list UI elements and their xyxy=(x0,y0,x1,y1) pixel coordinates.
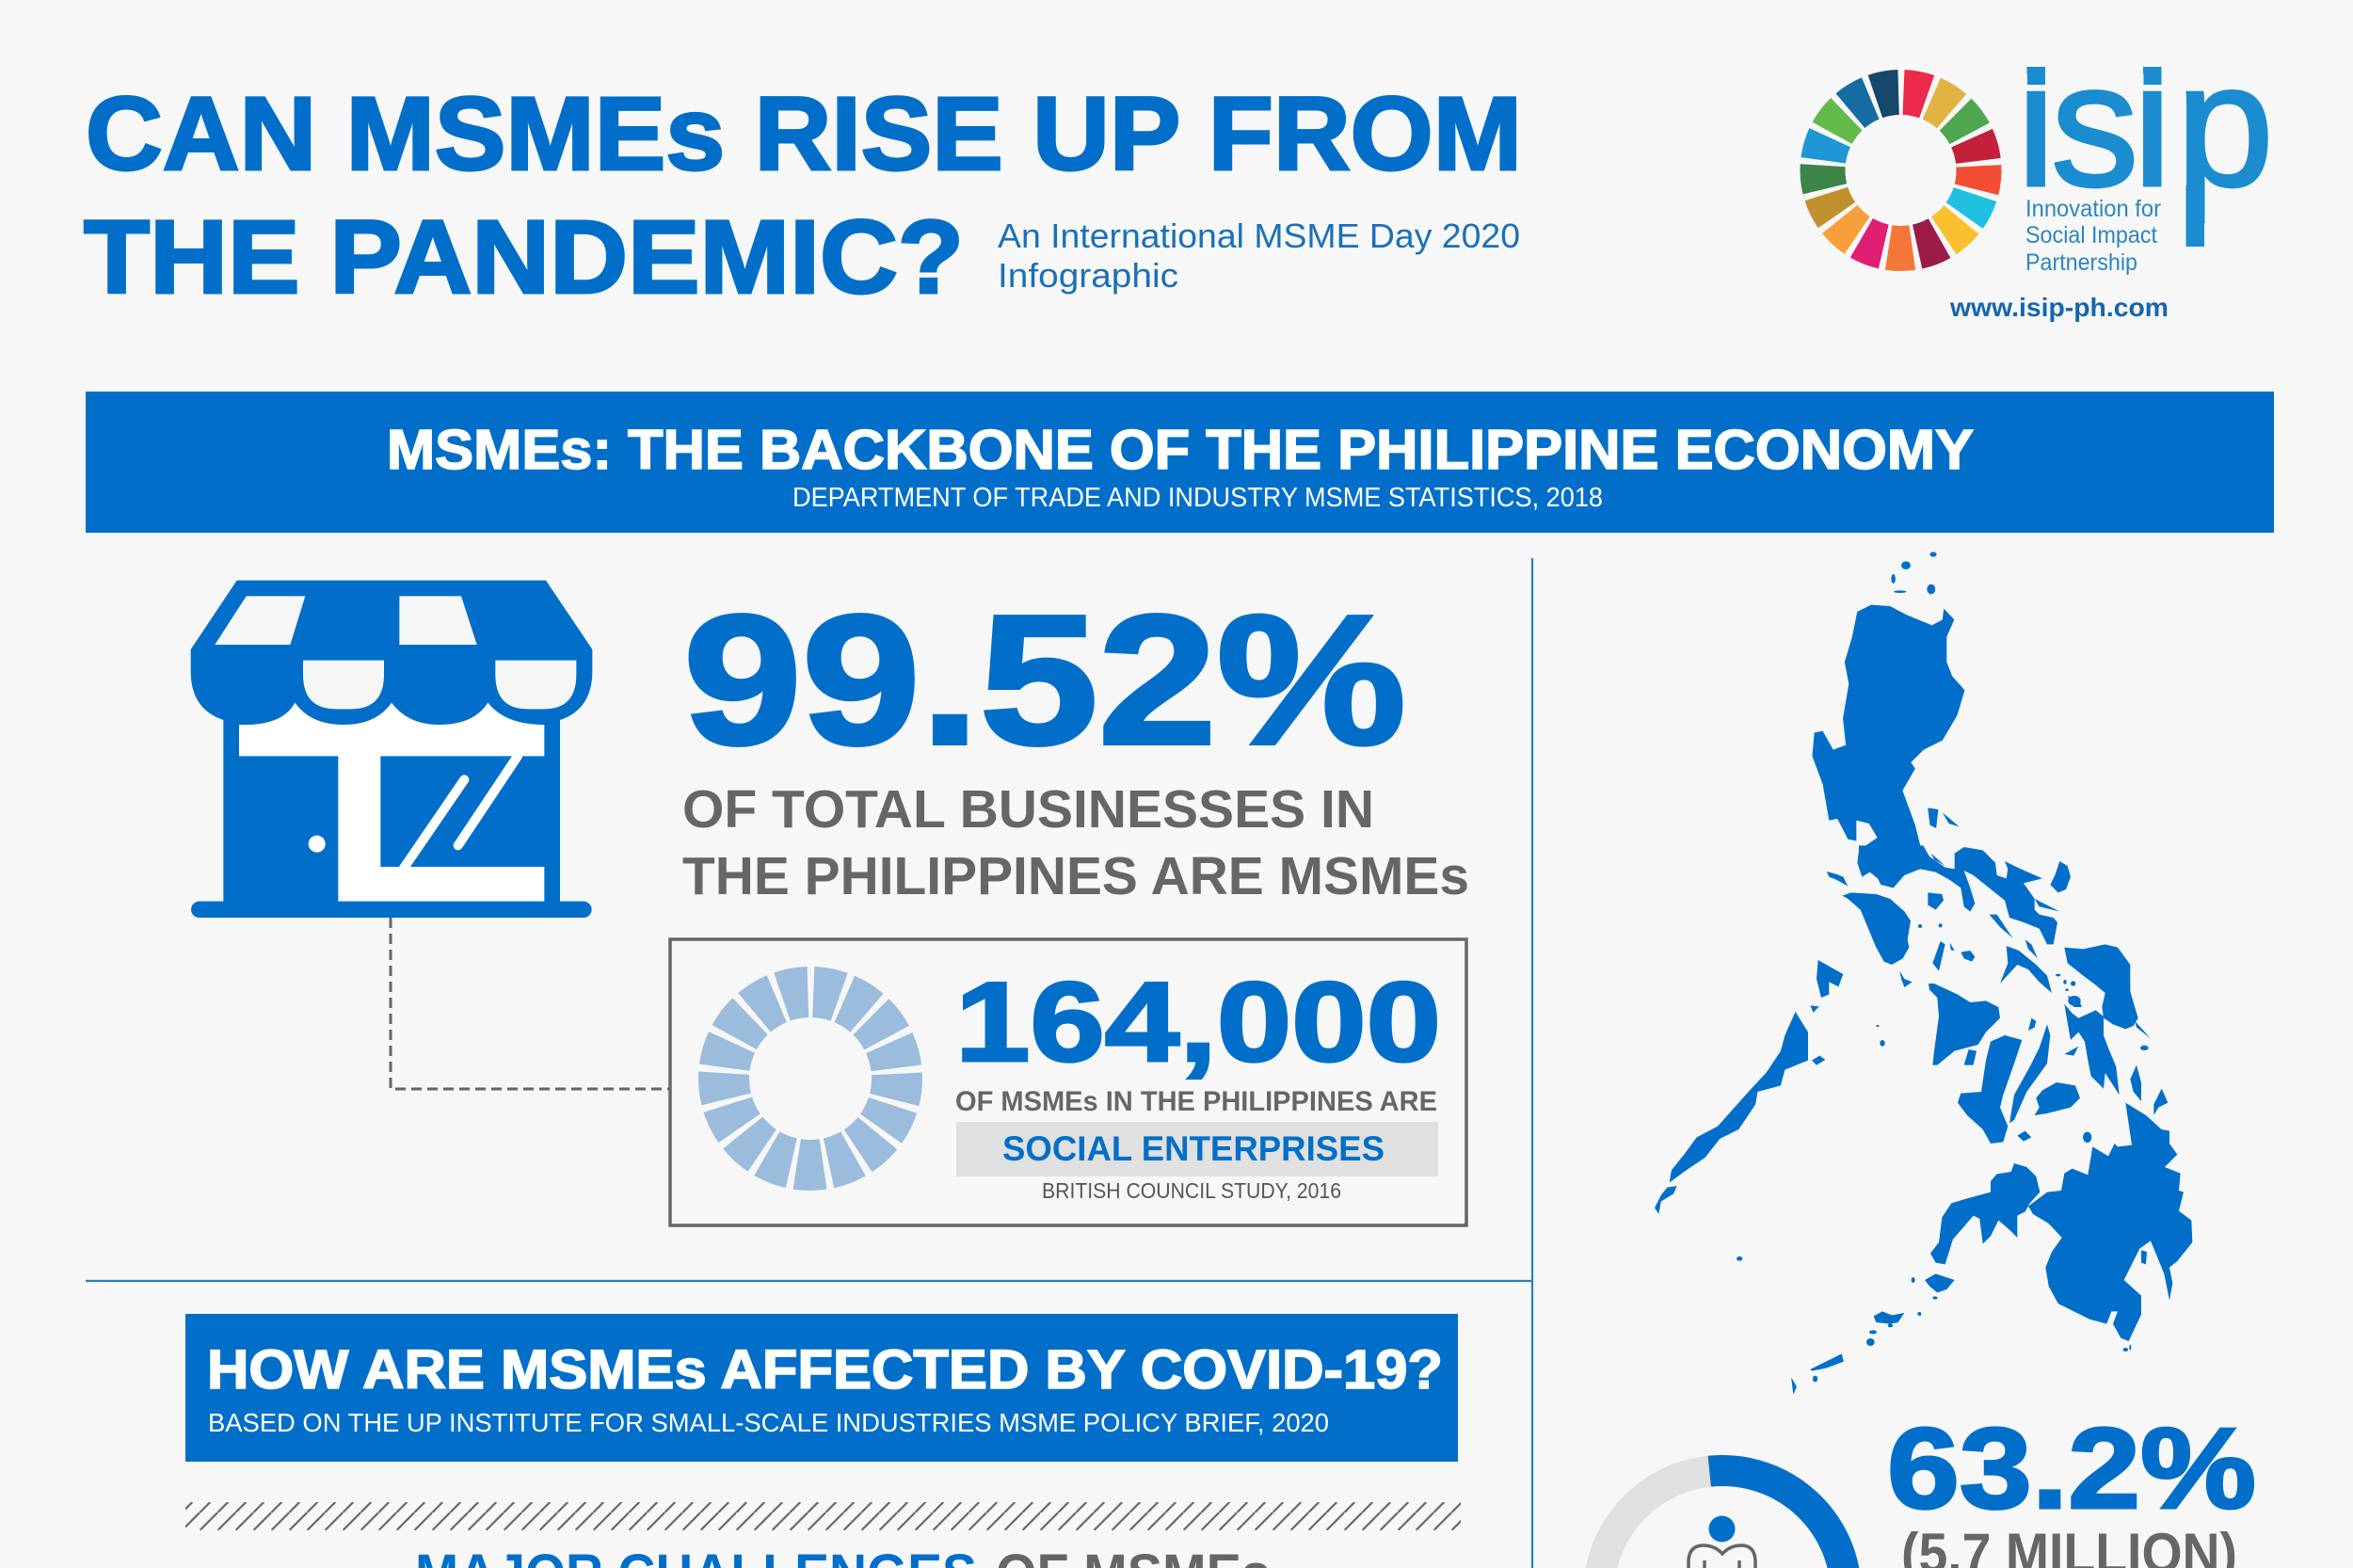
icon: storefront xyxy=(191,581,592,918)
banner: how are MSMEs affected: HOW ARE MSMEs AFFECTED BY COVID-19? xyxy=(207,1339,1443,1400)
website url: www.isip-ph.com xyxy=(1949,293,2169,322)
subtitle xyxy=(998,216,1520,295)
banner: how are MSMEs affected: BASED ON THE UP INSTITUTE FOR SMALL-SCALE INDUSTRIES MSME POLICY BRIEF, 2020 xyxy=(208,1408,1329,1437)
dashed connector xyxy=(391,918,669,1089)
stat: 99.52 percent: 99.52% xyxy=(683,577,1406,783)
logo: isip colour wheel xyxy=(1790,60,2011,280)
logo: tagline xyxy=(2025,196,2161,276)
subtitle: An International MSME Day 2020 xyxy=(998,216,1520,255)
title: CAN MSMEs RISE UP FROM xyxy=(86,76,1522,192)
chart: donut 63.2 percent xyxy=(1586,1458,1859,1568)
logo: isip wordmark: isip xyxy=(2016,26,2274,223)
icon: light blue wheel xyxy=(688,956,933,1201)
subtitle: Infographic xyxy=(998,256,1178,295)
banner: backbone of the economy: MSMEs: THE BACKBONE OF THE PHILIPPINE ECONOMY xyxy=(387,419,1974,481)
panel: social enterprises xyxy=(670,939,1466,1225)
label: social enterprises: SOCIAL ENTERPRISES xyxy=(1002,1129,1385,1168)
banner: backbone of the economy: DEPARTMENT OF TRADE AND INDUSTRY MSME STATISTICS, 2018 xyxy=(792,483,1603,513)
source: British Council study: BRITISH COUNCIL STUDY, 2016 xyxy=(1042,1178,1341,1203)
icon: person with book xyxy=(1689,1515,1755,1568)
logo: tagline: Innovation for xyxy=(2025,196,2161,222)
stat: 63.2 percent, 5.7 million xyxy=(1887,1404,2256,1568)
heading: major challenges of MSMEs xyxy=(415,1544,1271,1568)
logo: tagline: Partnership xyxy=(2025,249,2137,276)
banner: how are MSMEs affected xyxy=(185,1314,1458,1462)
stat: 63.2 percent, 5.7 million: 63.2% xyxy=(1887,1404,2256,1532)
title xyxy=(84,76,1522,315)
stat: 99.52 percent xyxy=(682,577,1469,906)
text: of MSMEs in the Philippines are: OF MSMEs IN THE PHILIPPINES ARE xyxy=(955,1086,1437,1117)
stat: 99.52 percent: THE PHILIPPINES ARE MSMEs xyxy=(682,846,1469,906)
map: Philippines xyxy=(1655,552,2192,1395)
stat: 99.52 percent: OF TOTAL BUSINESSES IN xyxy=(682,779,1374,840)
stat: 164,000: 164,000 xyxy=(955,959,1441,1085)
logo: tagline: Social Impact xyxy=(2025,222,2157,248)
title: THE PANDEMIC? xyxy=(84,200,964,315)
banner: backbone of the economy xyxy=(86,392,2274,533)
label: social enterprises xyxy=(956,1122,1438,1176)
